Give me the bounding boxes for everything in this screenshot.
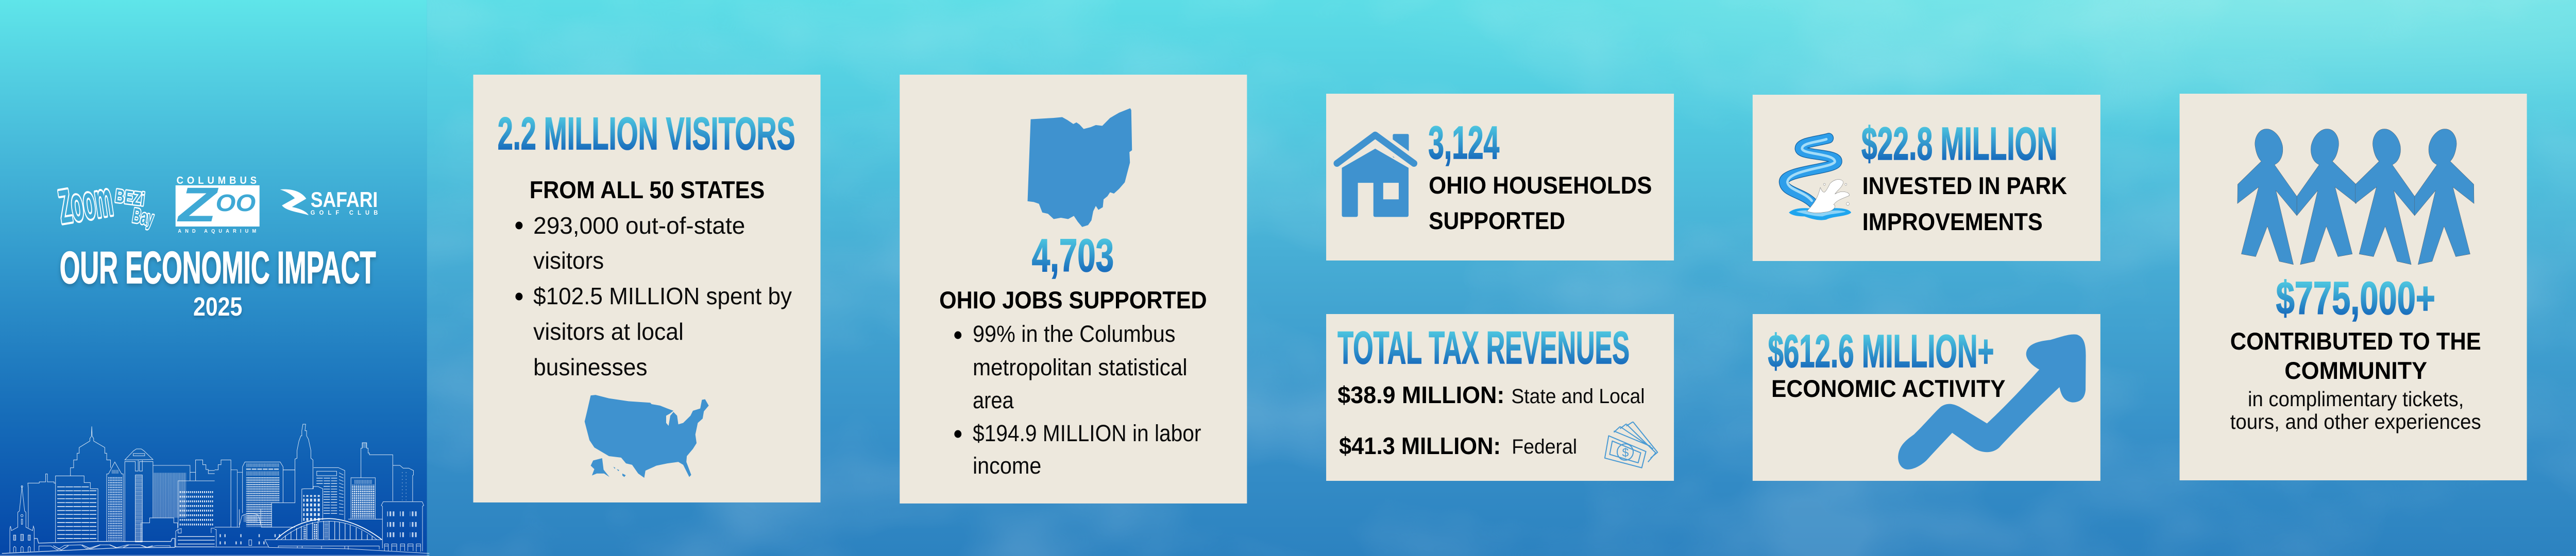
icon: Ohio map — [1028, 108, 1132, 227]
label: contributed to the community — [2230, 327, 2481, 384]
illustration: Columbus skyline — [0, 424, 429, 555]
bullet list: job stats: area — [973, 388, 1014, 413]
stat: $775,000+: $775,000+ — [2276, 272, 2435, 324]
panel: households — [1326, 94, 1674, 260]
label: contributed to the community: COMMUNITY — [2284, 357, 2427, 384]
text block: complimentary experiences: tours, and other experiences — [2230, 410, 2481, 433]
title: OUR ECONOMIC IMPACT — [60, 242, 376, 293]
bullet list: visitor stats: 293,000 out-of-state — [533, 213, 745, 239]
subheading: from all 50 states: FROM ALL 50 STATES — [530, 176, 765, 203]
label: invested in park improvements: IMPROVEMENTS — [1862, 208, 2043, 235]
icon: paper-chain people — [2238, 129, 2474, 265]
row: state and local: State and Local — [1511, 385, 1645, 408]
logo: Zoombezi Bay: Zoom — [55, 172, 116, 233]
stat: 3,124: 3,124 — [1428, 117, 1499, 169]
row: state and local: $38.9 MILLION: — [1337, 383, 1504, 408]
bullet list: visitor stats: visitors at local — [533, 319, 684, 345]
label: Ohio households supported — [1429, 171, 1652, 234]
logo: Zoombezi Bay: BEZi — [114, 186, 146, 210]
year: 2025 — [193, 292, 242, 321]
panel: visitors — [473, 75, 821, 502]
icon: water slide — [1784, 138, 1851, 220]
panel: sidebar — [0, 0, 429, 556]
bullet list: visitor stats — [515, 213, 792, 380]
icon: fan of money — [1605, 422, 1657, 468]
panel: tax revenues — [1326, 314, 1674, 481]
logo: Zoombezi Bay: Bay — [131, 204, 156, 231]
icon: house — [1337, 134, 1414, 217]
icon: United States map — [585, 395, 709, 478]
row: state and local — [1337, 383, 1645, 408]
bullet list: visitor stats: visitors — [533, 248, 604, 274]
panel: park improvements — [1753, 95, 2100, 261]
bullet list: visitor stats: businesses — [533, 355, 647, 380]
panel: jobs — [900, 75, 1247, 503]
bullet list: visitor stats: $102.5 MILLION spent by — [533, 284, 792, 309]
logo: Safari Golf Club — [280, 187, 378, 216]
bullet list: job stats: 99% in the Columbus — [973, 322, 1175, 347]
icon: rising arrow — [1898, 334, 2086, 470]
label: invested in park improvements: INVESTED IN PARK — [1862, 172, 2067, 199]
row: federal: Federal — [1512, 436, 1577, 458]
text block: complimentary experiences: in complimentary tickets, — [2248, 388, 2464, 411]
bullet list: job stats — [954, 322, 1201, 479]
bullet list: job stats: income — [973, 454, 1041, 479]
heading: 2.2 million visitors: 2.2 MILLION VISITORS — [498, 108, 795, 160]
text block: complimentary experiences — [2230, 388, 2481, 433]
bullet list: job stats: $194.9 MILLION in labor — [973, 421, 1201, 446]
subheading: Ohio jobs supported: OHIO JOBS SUPPORTED — [939, 286, 1207, 314]
label: economic activity: ECONOMIC ACTIVITY — [1771, 375, 2006, 402]
stat: 4,703: 4,703 — [1032, 230, 1114, 282]
logo: Columbus Zoo and Aquarium — [176, 175, 260, 234]
icon: fan of money: $ — [1622, 446, 1629, 459]
logo: Columbus Zoo and Aquarium: COLUMBUS — [177, 175, 257, 186]
row: federal: $41.3 MILLION: — [1339, 433, 1501, 459]
label: contributed to the community: CONTRIBUTED TO THE — [2230, 327, 2481, 355]
label: Ohio households supported: OHIO HOUSEHOLDS — [1429, 171, 1652, 199]
stat: $612.6 million+: $612.6 MILLION+ — [1768, 325, 1994, 377]
logo: Columbus Zoo and Aquarium: OO — [216, 190, 256, 216]
logo: Columbus Zoo and Aquarium: AND AQUARIUM — [178, 229, 256, 234]
heading: total tax revenues: TOTAL TAX REVENUES — [1337, 322, 1630, 374]
label: invested in park improvements — [1862, 172, 2067, 235]
logo: Columbus Zoo and Aquarium: Z — [176, 178, 218, 232]
logo: Safari Golf Club: GOLF CLUB — [311, 210, 378, 216]
row: federal — [1339, 433, 1577, 459]
stat: $22.8 million: $22.8 MILLION — [1861, 118, 2058, 170]
logo: Safari Golf Club: SAFARI — [311, 187, 378, 212]
logo: Zoombezi Bay — [55, 172, 156, 233]
bullet list: job stats: metropolitan statistical — [973, 355, 1188, 380]
label: Ohio households supported: SUPPORTED — [1429, 207, 1565, 234]
panel: community — [2180, 94, 2527, 480]
panel: economic activity — [1753, 314, 2100, 481]
